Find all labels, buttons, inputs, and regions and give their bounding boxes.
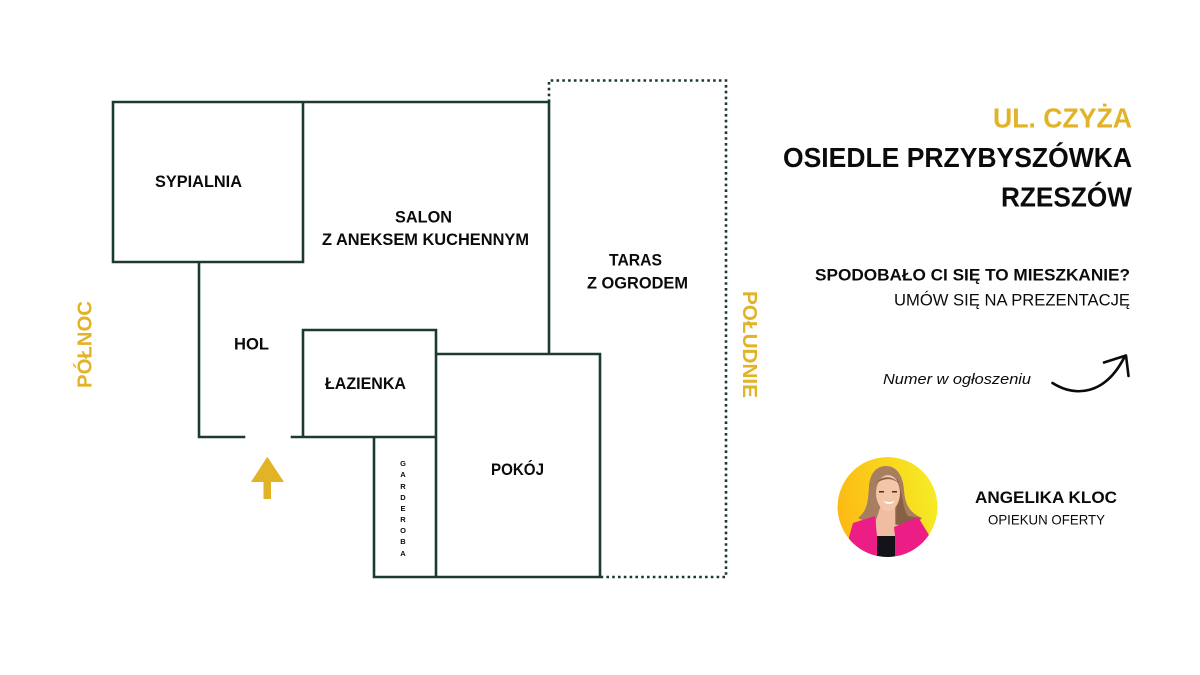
heading: address: RZESZÓW [1001, 182, 1132, 212]
room label: garderoba: R [400, 515, 406, 524]
call to action text: SPODOBAŁO CI SIĘ TO MIESZKANIE? [815, 266, 1130, 284]
call to action text: UMÓW SIĘ NA PREZENTACJĘ [894, 290, 1130, 310]
room label: łazienka: ŁAZIENKA [325, 375, 406, 393]
room label: garderoba: R [400, 482, 406, 491]
room label: garderoba: A [400, 549, 406, 558]
room label: taras [587, 252, 688, 292]
icon: entrance arrow [251, 457, 284, 499]
portrait photo [838, 457, 938, 560]
room label: pokój: POKÓJ [491, 460, 544, 479]
icon: curved arrow [1052, 356, 1128, 391]
room label: salon: SALON [395, 208, 452, 226]
agent name and role: OPIEKUN OFERTY [988, 512, 1106, 528]
room label: taras: Z OGRODEM [587, 274, 688, 292]
room label: garderoba: D [400, 493, 406, 502]
compass label: północ: PÓŁNOC [72, 301, 96, 388]
compass label: południe: POŁUDNIE [738, 291, 760, 398]
room label: sypialnia: SYPIALNIA [155, 173, 242, 191]
room label: garderoba: G [400, 459, 406, 468]
agent name and role [975, 488, 1117, 528]
room label: garderoba: O [400, 526, 406, 535]
room label: garderoba: E [400, 504, 406, 513]
heading: address: UL. CZYŻA [993, 102, 1132, 134]
room label: garderoba [400, 459, 406, 558]
heading: address [783, 102, 1132, 212]
room label: salon [322, 208, 529, 249]
call to action text [815, 266, 1130, 310]
room label: garderoba: A [400, 470, 406, 479]
listing number note: Numer w ogłoszeniu [883, 371, 1032, 388]
room label: salon: Z ANEKSEM KUCHENNYM [322, 231, 529, 249]
room label: taras: TARAS [609, 252, 662, 270]
floor plan walls [113, 102, 600, 577]
room label: garderoba: B [400, 537, 406, 546]
agent name and role: ANGELIKA KLOC [975, 488, 1117, 507]
terrace dotted outline [549, 80, 726, 577]
room label: hol: HOL [234, 336, 269, 354]
heading: address: OSIEDLE PRZYBYSZÓWKA [783, 142, 1132, 173]
